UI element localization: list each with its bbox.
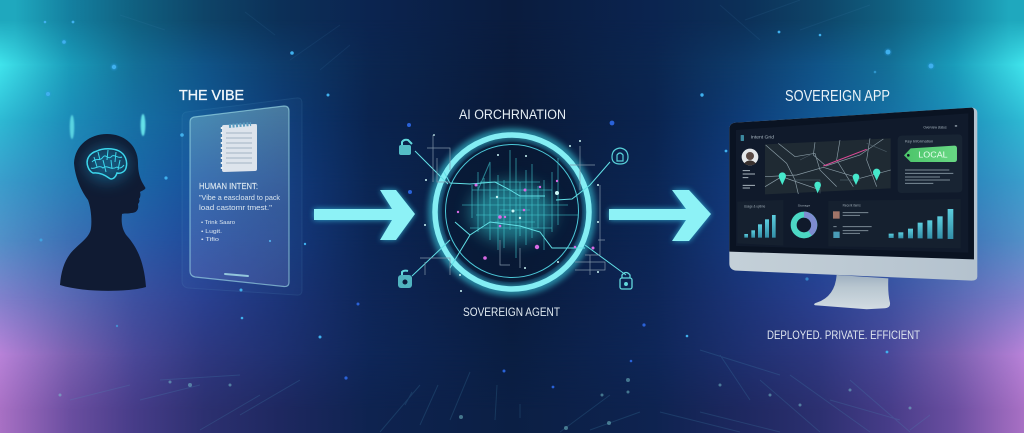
network traces — [412, 135, 626, 276]
monitor frame — [729, 108, 977, 281]
arrow: vibe to orchestration — [314, 190, 415, 240]
heading: the vibe: THE VIBE — [179, 87, 244, 104]
panel: bar chart small — [737, 200, 783, 246]
text block: human intent: load castomr tmest." — [199, 203, 272, 212]
donut chart — [794, 204, 814, 235]
panel: profile — [742, 149, 758, 188]
caption: DEPLOYED. PRIVATE. EFFICIENT — [767, 328, 921, 342]
arrow: orchestration to app — [609, 190, 711, 241]
icon: brain — [87, 149, 127, 179]
icon: lock bottom right — [620, 272, 632, 289]
panel: activity list and bar chart — [828, 199, 961, 248]
icon: human head silhouette with glowing brain — [60, 134, 146, 291]
heading: sovereign app: SOVEREIGN APP — [785, 88, 890, 105]
monitor stand — [814, 275, 890, 309]
top bar labels: ≡ — [955, 123, 958, 128]
text block: human intent: "Vibe a eascloard to pack — [199, 193, 280, 202]
monitor screen — [729, 108, 974, 259]
icon: lock top left — [399, 140, 412, 155]
panel: activity list and bar chart: Recent items — [843, 204, 861, 208]
top bar labels — [741, 123, 958, 141]
panel: bar chart small: Usage & uptime — [744, 204, 765, 208]
panel: human intent card — [182, 98, 302, 295]
icon: notepad — [222, 124, 257, 172]
text block: human intent: • Tifio — [201, 237, 219, 243]
label: sovereign agent: SOVEREIGN AGENT — [463, 305, 561, 319]
icon: network core ring — [412, 134, 626, 292]
monitor — [729, 108, 977, 309]
panel: local tag — [898, 134, 962, 193]
icon: lock top right — [612, 148, 628, 164]
light streaks — [70, 114, 145, 139]
tag: local: LOCAL — [918, 149, 948, 159]
text block: human intent: • Trink Saaro — [201, 220, 235, 226]
panel: map — [765, 138, 891, 194]
text block: human intent: • Lugit. — [201, 229, 223, 235]
top bar labels: Intent Grid — [751, 134, 774, 139]
panel: local tag: Key Information — [905, 139, 933, 144]
text block: human intent — [199, 182, 280, 243]
heading: ai orchestration: AI ORCHRNATION — [459, 107, 566, 122]
text block: human intent: HUMAN INTENT: — [199, 182, 258, 191]
donut chart: Storage — [798, 204, 811, 208]
network nodes — [457, 180, 594, 260]
icon: lock bottom left — [398, 271, 412, 288]
top bar labels: Overview status — [923, 125, 947, 130]
